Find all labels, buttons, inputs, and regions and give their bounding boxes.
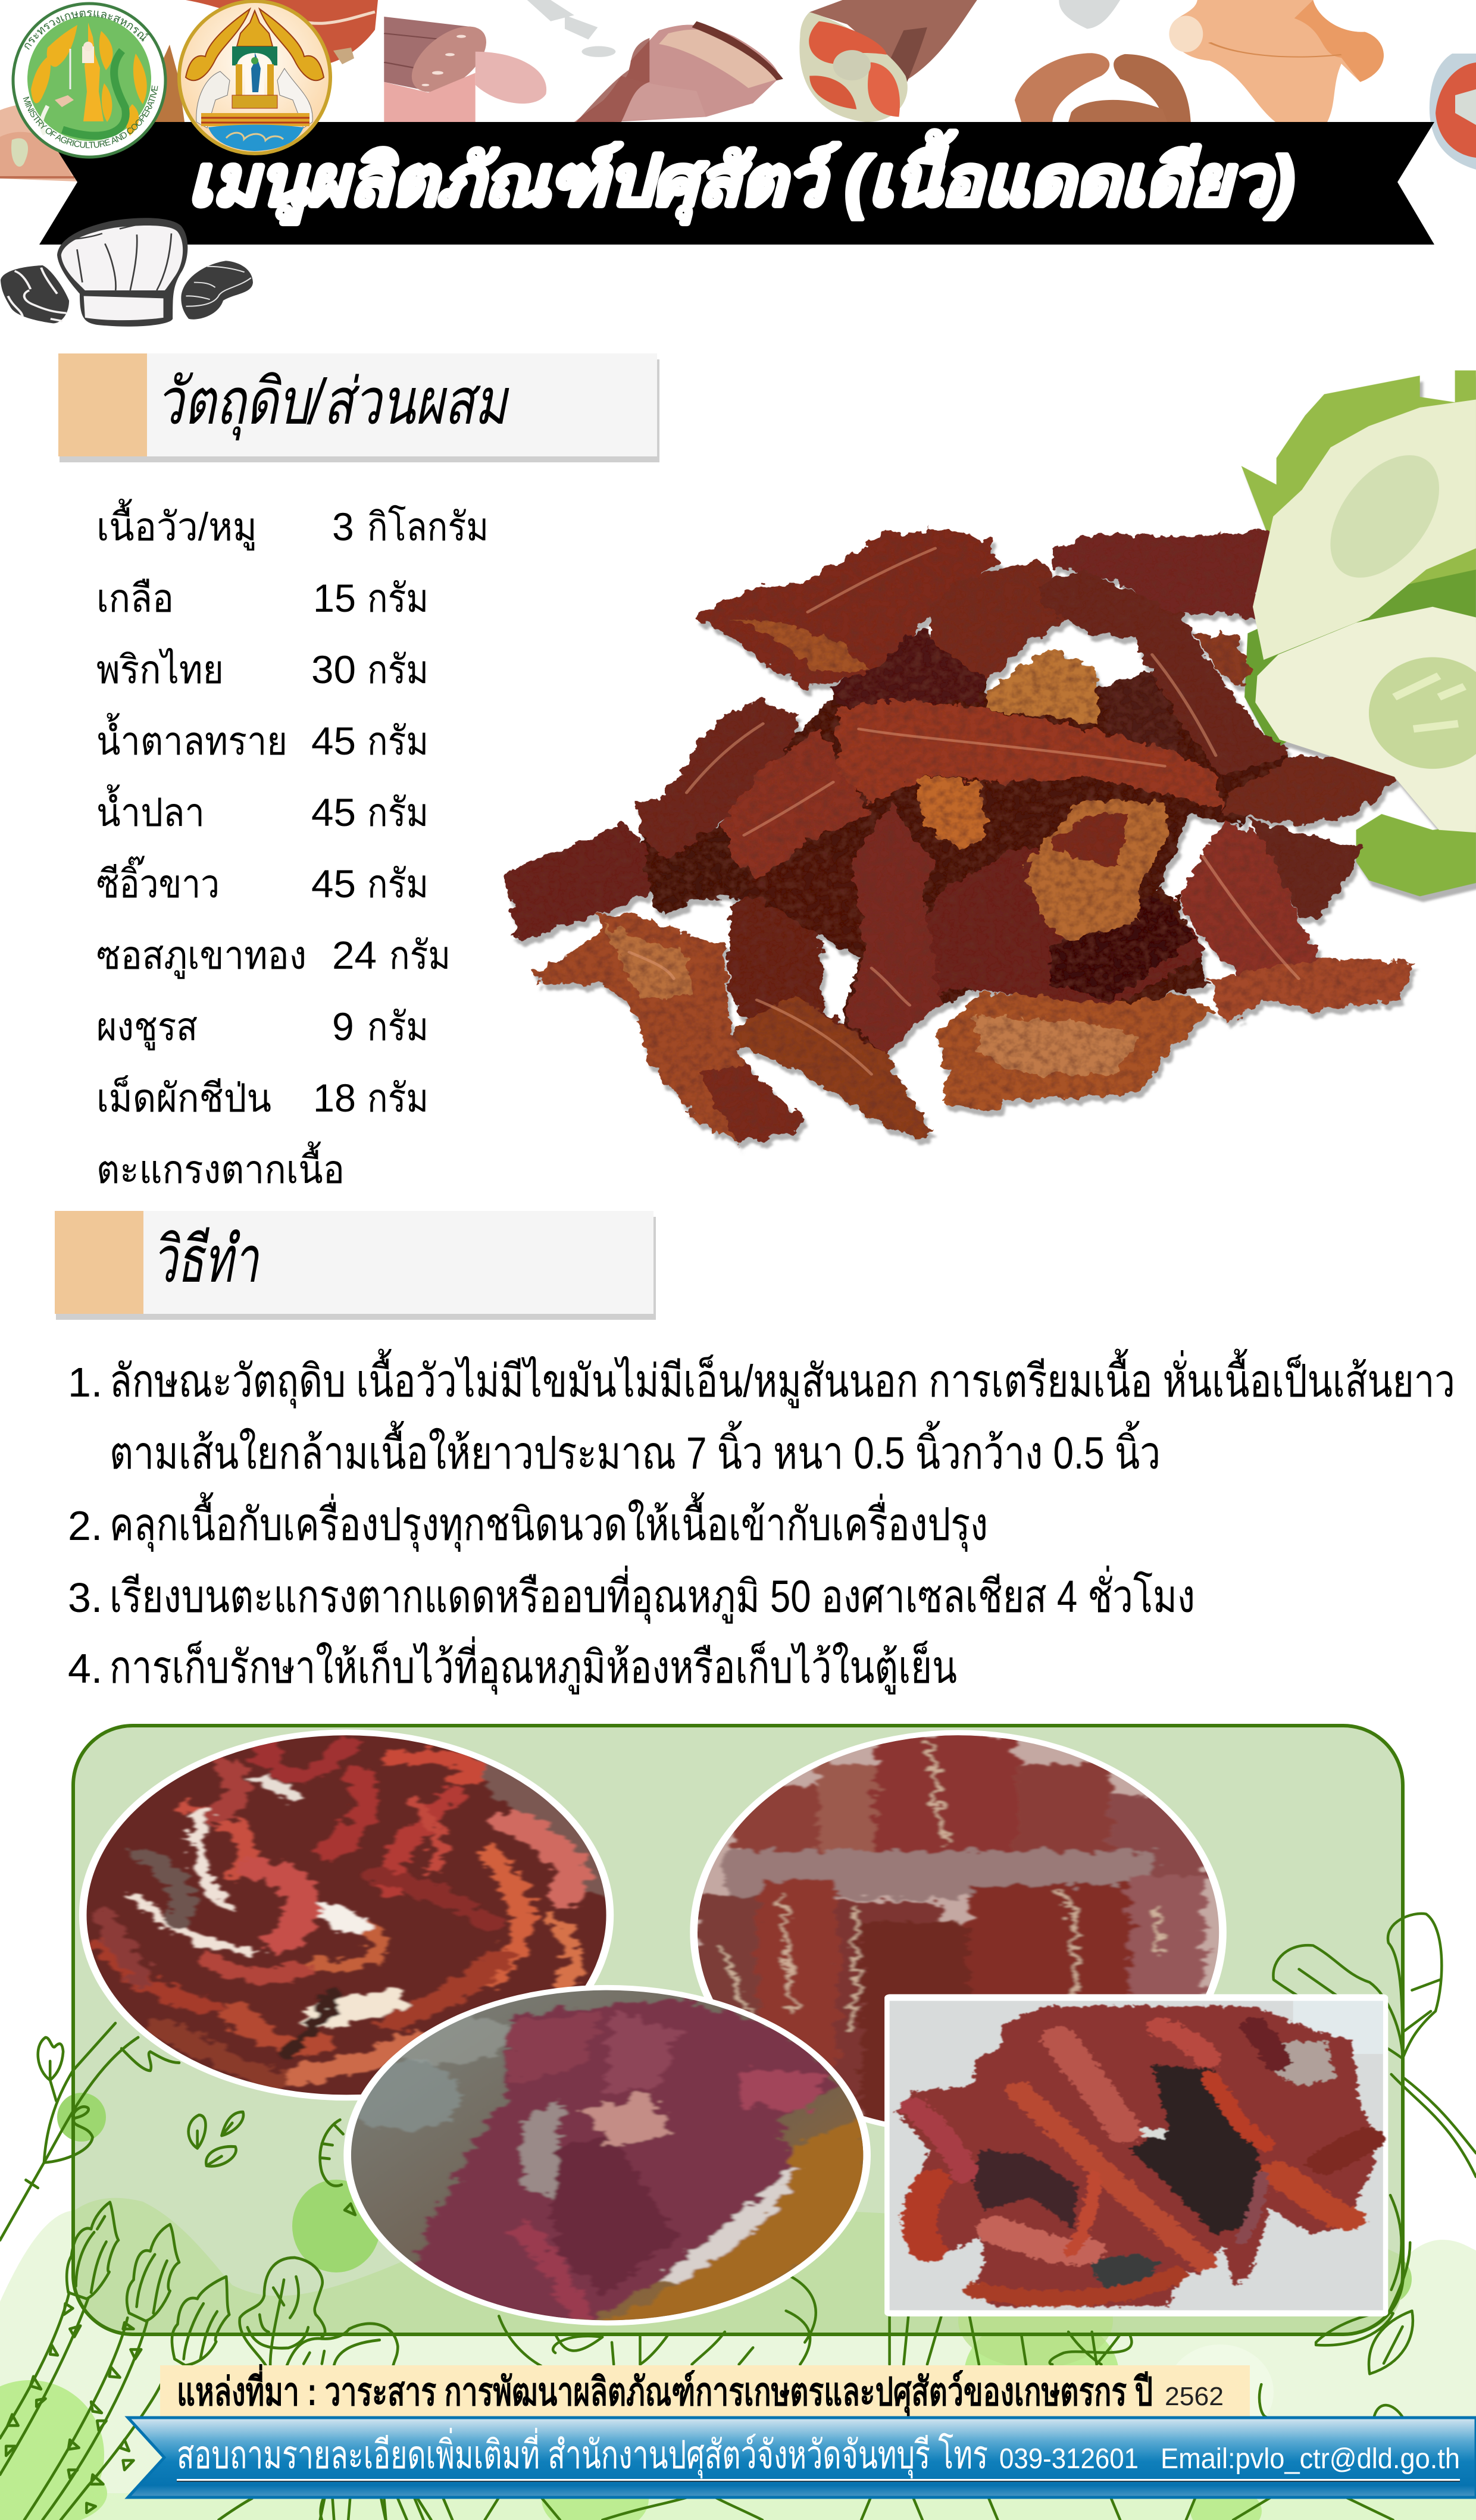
heading: ingredients: วัตถุดิบ/ส่วนผสม: [156, 365, 509, 441]
callout: source note: 2562: [1165, 2382, 1224, 2411]
text block: ingredient list: เกลือ: [96, 576, 174, 620]
photo: marinated sliced beef (oval): [79, 1730, 617, 2103]
photo: raw beef chunks on board (oval): [343, 1985, 871, 2327]
text block: method steps: เรียงบนตะแกรงตากแดดหรืออบที่อุณหภูมิ 50 องศาเซลเชียส 4 ชั่วโมง: [110, 1566, 1195, 1624]
cucumber slices: [1253, 399, 1476, 832]
text block: ingredient list: เม็ดผักชีป่น: [96, 1075, 271, 1120]
text block: ingredient list: น้ำตาลทราย: [96, 713, 287, 763]
heading: method: วิธีทำ: [152, 1223, 259, 1295]
text block: ingredient list: 9: [332, 1004, 354, 1048]
text block: ingredient list: 18: [313, 1076, 356, 1120]
text block: ingredient list: ผงชูรส: [96, 1004, 198, 1051]
chef hat: [57, 218, 187, 327]
text block: ingredient list: 45: [311, 719, 356, 763]
meat highlights: [629, 548, 1299, 1074]
icon: far-left plate of meat: [0, 45, 185, 181]
icon: cross-cut leg: [799, 0, 977, 122]
title: เมนูผลิตภัณฑ์ปศุสัตว์ (เนื้อแดดเดียว): [188, 130, 1294, 224]
text block: ingredient list: [96, 499, 489, 1191]
text block: method steps: [68, 1348, 1455, 1695]
text block: ingredient list: กรัม: [367, 862, 429, 906]
top meat illustrations band: [0, 0, 1476, 181]
icon: agriculture ministry seal: กระทรวงเกษตรและสหกรณ์: [24, 10, 150, 50]
text block: ingredient list: กรัม: [367, 1004, 429, 1048]
panel: ingredients heading: [58, 353, 659, 462]
background: pale green hills at page bottom: [0, 2211, 1476, 2520]
text block: ingredient list: 15: [313, 576, 356, 620]
footer: blue contact ribbon: 039-312601: [999, 2443, 1139, 2475]
photo: packaged dried beef (oval): [690, 1730, 1227, 2135]
photo: finished dried beef (framed): [884, 1994, 1388, 2316]
text block: method steps: 4.: [68, 1645, 102, 1692]
text block: method steps: 2.: [68, 1502, 102, 1549]
text block: ingredient list: 30: [311, 647, 356, 691]
text block: ingredient list: เนื้อวัว/หมู: [96, 499, 257, 551]
text block: ingredient list: กรัม: [367, 719, 429, 763]
icon: line-art vegetables, bottom-left: [0, 2023, 452, 2520]
panel: green photo panel: [57, 1726, 1403, 2368]
text block: ingredient list: กรัม: [367, 576, 429, 620]
meat pile: [506, 528, 1416, 1143]
right steak: [181, 261, 253, 320]
left steak: [1, 265, 69, 323]
icon: red steak behind seal: [186, 0, 378, 65]
banner: black title ribbon: [39, 122, 1434, 245]
text block: ingredient list: กรัม: [367, 647, 429, 691]
photo: sun-dried fried meat with cucumber garnish: [506, 370, 1476, 1143]
footer: blue contact ribbon: [128, 2418, 1476, 2497]
icon: chef hat with two steaks: [1, 218, 253, 327]
text block: ingredient list: ตะแกรงตากเนื้อ: [96, 1141, 345, 1191]
asparagus 2: [127, 2224, 179, 2321]
icon: line-art leaves, middle and right side: [320, 1914, 1476, 2520]
text block: method steps: การเก็บรักษาให้เก็บไว้ที่อุณหภูมิห้องหรือเก็บไว้ในตู้เย็น: [110, 1636, 957, 1695]
text block: ingredient list: 45: [311, 790, 356, 834]
text block: ingredient list: 3: [332, 505, 354, 549]
text block: method steps: คลุกเนื้อกับเครื่องปรุงทุกชนิดนวดให้เนื้อเข้ากับเครื่องปรุง: [110, 1492, 988, 1552]
text block: method steps: 3.: [68, 1574, 102, 1621]
text block: ingredient list: กรัม: [389, 933, 451, 977]
text block: ingredient list: กรัม: [367, 790, 429, 834]
asparagus 3: [172, 2277, 229, 2365]
icon: salami: [384, 17, 546, 122]
asparagus 1: [67, 2202, 118, 2299]
footer: blue contact ribbon: Email:pvlo_ctr@dld.go.th: [1161, 2443, 1460, 2475]
text block: ingredient list: ซอสภูเขาทอง: [96, 933, 307, 979]
icon: sausages: [1015, 53, 1191, 122]
footer: blue contact ribbon: สอบถามรายละเอียดเพิ่มเติมที่ สำนักงานปศุสัตว์จังหวัดจันทบุรี โทร: [177, 2428, 988, 2479]
lettuce garnish: [1242, 370, 1476, 896]
icon: far-right cut meat: [1430, 54, 1476, 170]
text block: ingredient list: 45: [311, 862, 356, 906]
text block: ingredient list: 24: [332, 933, 377, 977]
panel: method heading: [55, 1211, 656, 1320]
text block: ingredient list: กิโลกรัม: [367, 505, 489, 549]
text block: ingredient list: น้ำปลา: [96, 784, 205, 834]
icon: gray utensil: [527, 0, 1120, 57]
callout: source note: [160, 2364, 1250, 2419]
icon: sliced ham: [574, 21, 783, 122]
text block: method steps: 1.: [68, 1359, 102, 1405]
text block: ingredient list: กรัม: [367, 1076, 429, 1120]
text block: ingredient list: ซีอิ๊วขาว: [96, 855, 220, 906]
stems below the panel: [499, 2274, 1403, 2417]
text block: ingredient list: พริกไทย: [96, 647, 224, 691]
text block: method steps: ตามเส้นใยกล้ามเนื้อให้ยาวประมาณ 7 นิ้ว หนา 0.5 นิ้วกว้าง 0.5 นิ้ว: [110, 1420, 1161, 1479]
icon: chicken drumstick: [1169, 0, 1384, 122]
icon: livestock department seal: [179, 1, 330, 154]
spinach leaves: [240, 2258, 325, 2365]
